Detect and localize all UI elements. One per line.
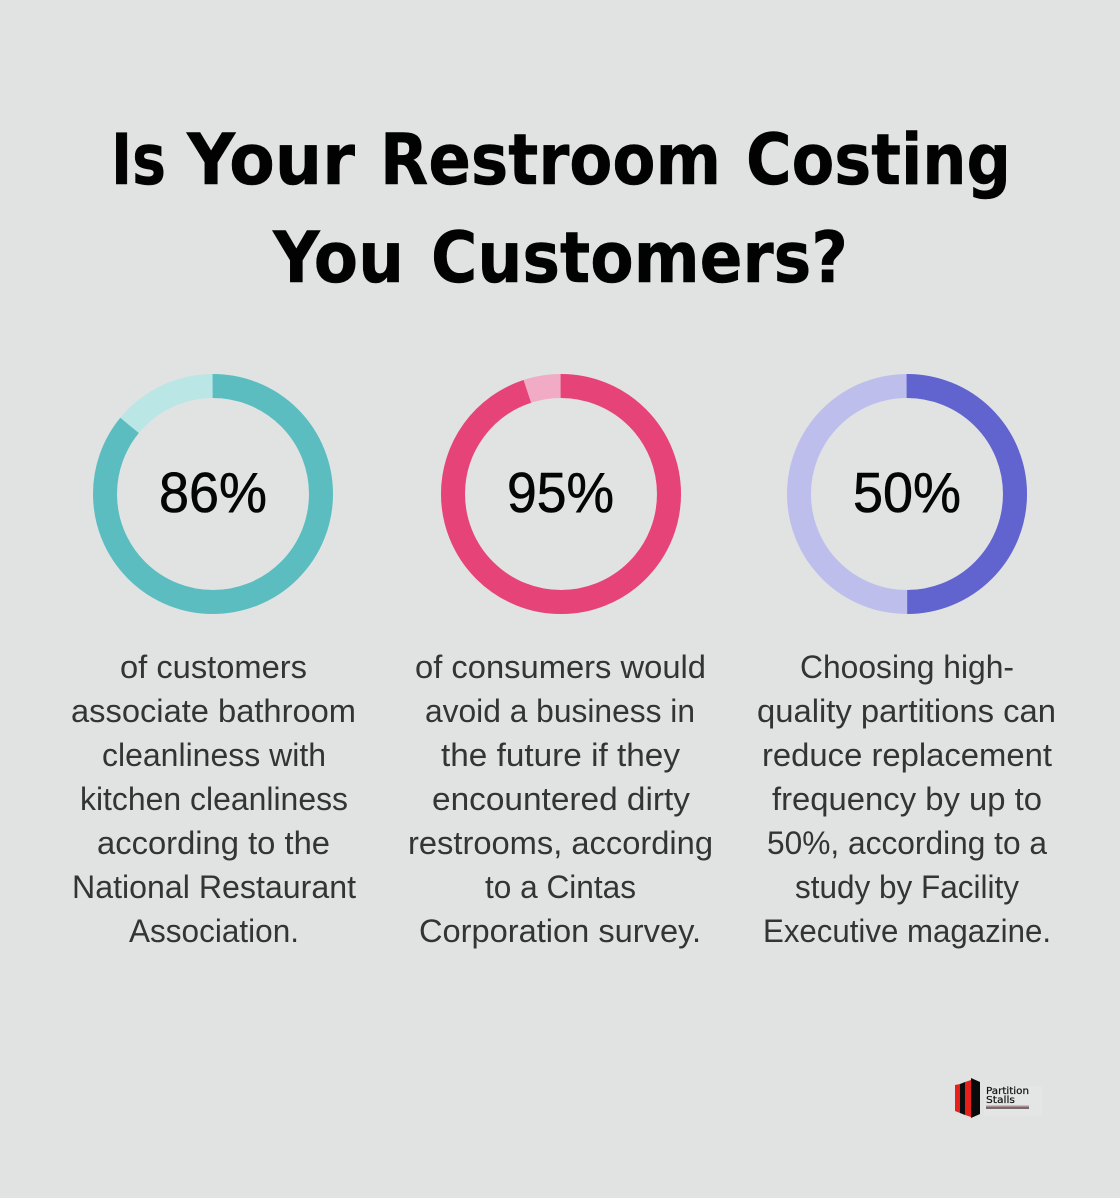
title: Customers? — [431, 217, 848, 299]
description: 86% stat: kitchen cleanliness — [80, 781, 348, 817]
description: 86% stat: according to the — [97, 825, 330, 861]
description: 95% stat — [408, 649, 713, 949]
tagline bar — [986, 1105, 1029, 1109]
description: 95% stat: encountered dirty — [432, 781, 690, 817]
wordmark: Partition — [986, 1086, 1029, 1097]
panel: 95% stat — [408, 386, 713, 949]
description: 86% stat: cleanliness with — [102, 737, 326, 773]
description: 86% stat: Association. — [129, 913, 299, 949]
title: Restroom — [380, 119, 721, 201]
description: 95% stat: the future if they — [441, 737, 680, 773]
description: 86% stat: of customers — [120, 649, 307, 685]
value: 50%: 50% — [853, 461, 961, 525]
donut chart: 86% — [105, 386, 321, 602]
description: 50% stat: reduce replacement — [762, 737, 1052, 773]
description: 50% stat: Choosing high- — [800, 649, 1014, 685]
description: 95% stat: of consumers would — [415, 649, 706, 685]
panel: 50% stat — [757, 386, 1056, 949]
description: 50% stat: frequency by up to — [772, 781, 1042, 817]
donut chart: 95% — [453, 386, 669, 602]
description: 95% stat: avoid a business in — [425, 693, 695, 729]
value: 86%: 86% — [159, 461, 267, 525]
title — [111, 119, 1011, 299]
description: 50% stat: Executive magazine. — [763, 913, 1051, 949]
title: Is — [111, 119, 166, 201]
description: 50% stat — [757, 649, 1056, 949]
description: 86% stat: National Restaurant — [72, 869, 356, 905]
title: Costing — [746, 119, 1011, 201]
wordmark — [986, 1086, 1029, 1106]
description: 86% stat — [71, 649, 356, 949]
icon: partition bars — [955, 1078, 980, 1118]
value: 95%: 95% — [507, 461, 614, 525]
wordmark: Stalls — [986, 1095, 1015, 1106]
description: 50% stat: quality partitions can — [757, 693, 1056, 729]
description: 95% stat: restrooms, according — [408, 825, 713, 861]
panel: 86% stat — [71, 386, 356, 949]
description: 95% stat: to a Cintas — [485, 869, 636, 905]
logo: Partition Stalls — [955, 1078, 1042, 1118]
description: 86% stat: associate bathroom — [71, 693, 356, 729]
description: 50% stat: study by Facility — [795, 869, 1019, 905]
donut chart: 50% — [799, 386, 1015, 602]
title: Your — [186, 119, 355, 201]
description: 95% stat: Corporation survey. — [419, 913, 701, 949]
title: You — [272, 217, 404, 299]
description: 50% stat: 50%, according to a — [767, 825, 1047, 861]
